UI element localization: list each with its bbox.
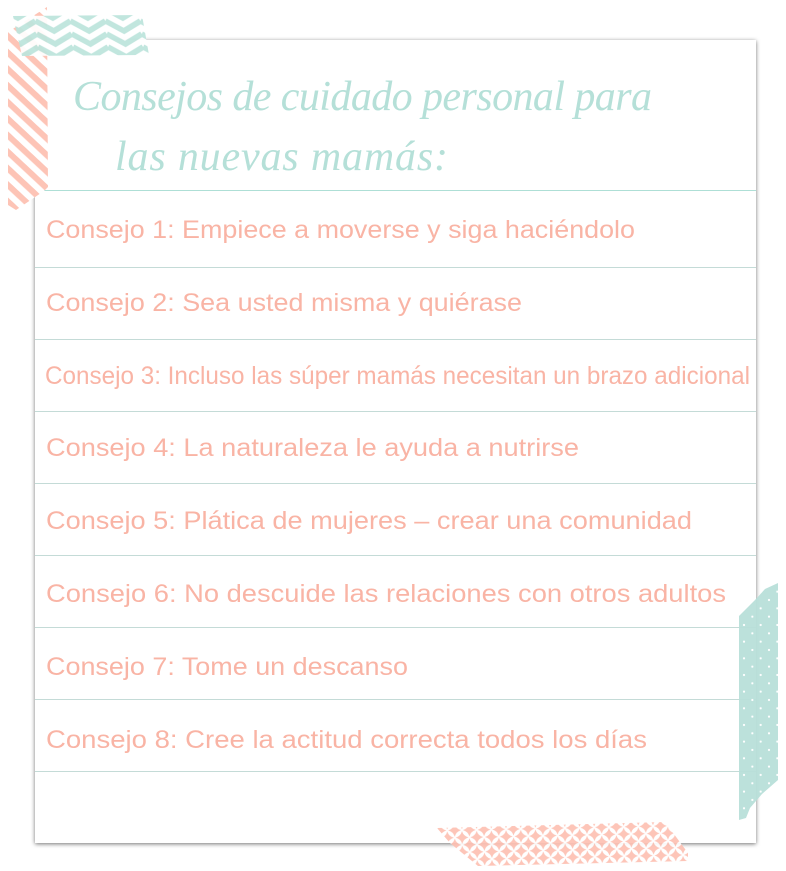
tip 4 row: Consejo 4: La naturaleza le ayuda a nutrirse: [46, 434, 579, 462]
tip 1 row: Consejo 1: Empiece a moverse y siga haciéndolo: [46, 216, 635, 244]
tip 3 row: Consejo 3: Incluso las súper mamás necesitan un brazo adicional: [45, 362, 750, 390]
list of tips: [35, 216, 756, 772]
washi tape: peach diamonds: [437, 822, 688, 866]
title line 1: Consejos de cuidado personal para: [73, 74, 652, 120]
tip 7 row: Consejo 7: Tome un descanso: [46, 653, 408, 681]
washi tape: mint polka dots: [739, 583, 778, 820]
title: [73, 74, 652, 180]
tip 2 row: Consejo 2: Sea usted misma y quiérase: [46, 289, 522, 317]
tip 6 row: Consejo 6: No descuide las relaciones con otros adultos: [46, 580, 726, 608]
washi tape: mint chevrons: [13, 15, 149, 56]
washi tape: peach stripes: [8, 7, 48, 210]
tip 8 row: Consejo 8: Cree la actitud correcta todos los días: [46, 726, 647, 754]
title line 2: las nuevas mamás:: [115, 134, 448, 180]
divider under title: [35, 190, 756, 191]
tip 5 row: Consejo 5: Plática de mujeres – crear una comunidad: [46, 507, 692, 535]
